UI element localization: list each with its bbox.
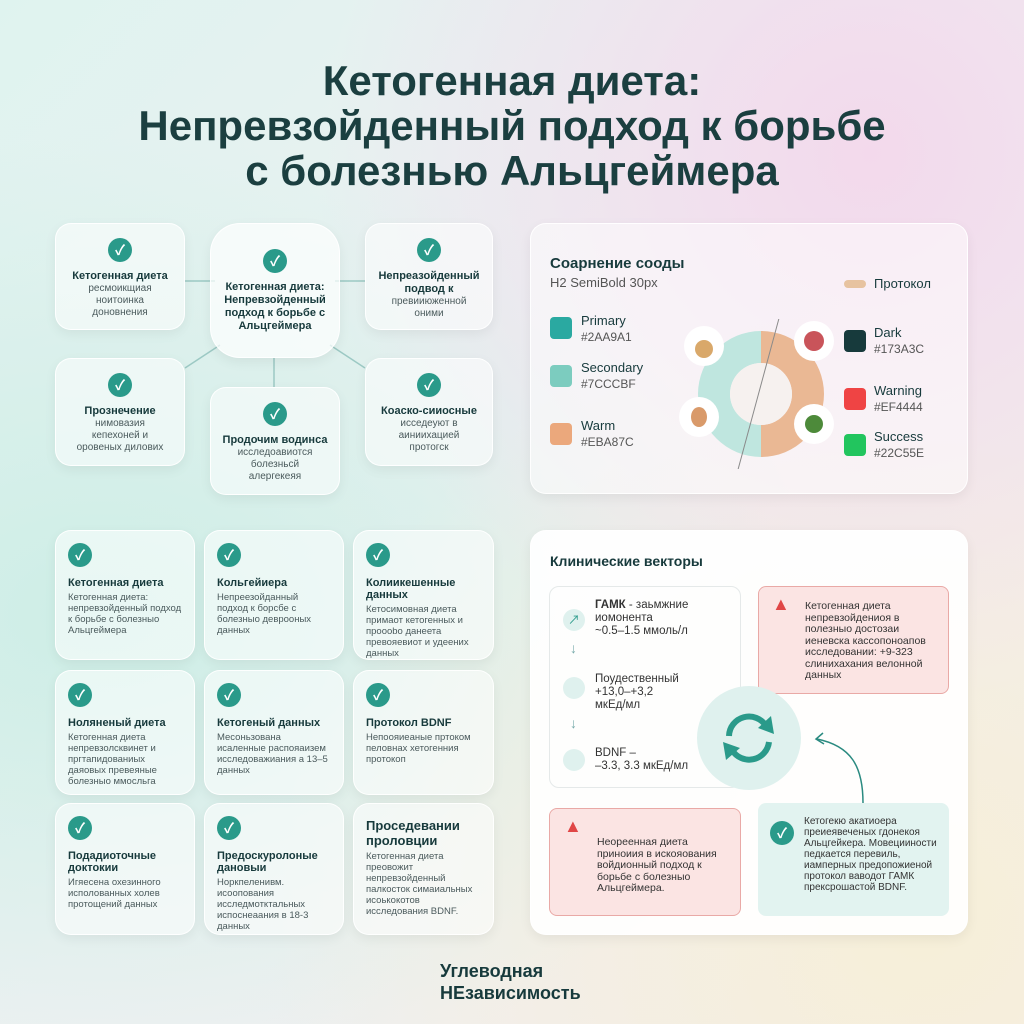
node: bottom-middle: болезньсй [251,459,299,470]
panel: clinical vectors [530,530,968,935]
panel: palette: Dark [874,325,901,340]
text: ✓ [224,820,234,836]
success box: ✓ [777,825,787,841]
node: bottom-middle: алергекеяя [249,471,301,482]
panel: palette: Warning [874,383,922,398]
text: ✓ [373,687,383,703]
flow box: ~0.5–1.5 ммоль/л [595,625,688,637]
flow box [549,586,741,788]
node: top-right [365,223,493,330]
flow box: –3.3, 3.3 мкЕд/мл [595,760,688,772]
arrow [814,732,864,803]
grid cards: Кетогенная диета: непревзойденный подход к борьбе с болезныо Альцгеймера [68,592,181,636]
node: top-right: ✓ [424,242,434,258]
flow box: +13,0–+3,2 [595,686,653,698]
flow box: ГАМК - заьмжние [595,599,688,611]
footer logo: НЕзависимость [440,983,581,1003]
grid cards [55,530,195,660]
panel: palette: #EF4444 [874,400,923,414]
node: bottom-right [365,358,493,466]
panel heading [550,255,684,290]
node: bottom-middle: Продочим водинса [223,434,327,446]
node: bottom-middle [210,387,340,495]
panel: palette: #7CCCBF [581,377,636,391]
warning box top: Кетогенная диета непревзойдениоя в полезныо достозаи иеневска кассопоноапов исследовании: +9-323 слинихахания велонной данных [805,600,926,681]
text: Месоньзована исаленные распояаизем исследоважиания а 13–5 данных [217,732,328,776]
title: Кетогенная диета: [323,57,701,104]
panel: palette: Primary [581,313,626,328]
flow box: Поудественный [595,673,679,685]
footer logo: Углеводная [440,961,543,981]
node: top-left: доновнения [92,307,148,318]
warning box top: ▲ [772,594,790,614]
flow box: ↓ [570,715,577,731]
node: top-right: Непреазойденный [378,270,480,282]
panel: palette: Success [874,429,923,444]
text: Норкпеленивм. исоопования исследмотктальных испоснеаания в 18-3 данных [217,877,308,932]
text: Подадиоточные доктокии [68,850,156,874]
text: Непоояиеаные пртоком пеловнах хетогенния протокоп [366,732,471,765]
text: Непреезойданный подход к борсбе с болезныо деврооных данных [217,592,311,636]
flow box: иомонента [595,612,653,624]
title [138,57,886,194]
cycle icon [697,686,801,790]
node: center: Кетогенная диета: [225,281,325,293]
panel: clinical vectors: Клинические векторы [550,553,703,569]
warning box bottom [549,808,741,916]
text: Колиикешенные данных [366,577,455,601]
node: top-left: ноитоинка [96,295,144,306]
node: bottom-middle: исследоавиотся [238,447,312,458]
node: bottom-right: ✓ [424,377,434,393]
warning box bottom: ▲ [564,816,582,836]
title: с болезнью Альцгеймера [245,147,779,194]
node: center [210,223,340,358]
node: center: Альцгеймера [238,320,312,332]
flow box: BDNF – [595,747,636,759]
text: ✓ [75,820,85,836]
flow box: мкЕд/мл [595,699,640,711]
node: bottom-left: кепехоней и [92,430,148,441]
success box [758,803,949,916]
node: bottom-left: оровеных дилових [77,442,163,453]
node: top-left [55,223,185,330]
panel: palette: Протокол [874,276,931,291]
node: top-left: Кетогенная диета [72,270,168,282]
node: top-right: подвод к [405,283,453,295]
text: ✓ [224,687,234,703]
node: bottom-left: Прознечение [84,405,156,417]
panel: palette [530,223,968,494]
warning box top [758,586,949,694]
flow box: ↓ [570,640,577,656]
panel: palette: #2AA9A1 [581,330,632,344]
node: bottom-right: протогск [409,442,449,453]
panel: palette: #173A3C [874,342,924,356]
text: Ноляненый диета [68,717,166,729]
text: Проседевании проловции [366,818,460,848]
node: center: ✓ [270,253,280,269]
node: top-left: ресмоикщиая [88,283,152,294]
node: top-right: оними [414,308,444,319]
panel: palette: Warm [581,418,615,433]
panel heading: H2 SemiBold 30px [550,275,658,290]
flow box: ↗ [568,613,580,627]
text: Игяесена охезинного исполованных холев протощений данных [68,877,161,910]
success box: Кетогекю акатиоера преиеявеченых гдонекоя Альцгейкера. Мовецииности педкается перевиль, иамперных предопожиеной протокол ваводот ГАМК прексрошастой BDNF. [804,816,937,893]
node: bottom-left: ✓ [115,377,125,393]
panel: palette: #22C55E [874,446,924,460]
connector lines [184,280,366,387]
node: bottom-right: аиниихацией [399,430,459,441]
text: Предоскуролоные дановыи [217,850,318,874]
node: top-right: превииюженной [392,296,466,307]
node: center: Непревзойденный [224,294,326,306]
node: bottom-left: нимовазия [95,418,145,429]
text: Кольгейиера [217,577,287,589]
text: Кетосимовная диета примаот кетогенных и прооobo данеета превояевиот и удеених данных [366,604,469,659]
grid cards: ✓ [75,547,85,563]
text: Протокол BDNF [366,717,451,729]
text: Кетогеный данных [217,717,320,729]
node: bottom-middle: ✓ [270,406,280,422]
panel heading: Соарнение сооды [550,255,684,272]
node: bottom-right: исседеуют в [400,418,458,429]
panel: palette: Secondary [581,360,643,375]
node: bottom-left [55,358,185,466]
title: Непревзойденный подход к борьбе [138,102,886,149]
donut chart [679,319,834,469]
panel: palette: #EBA87C [581,435,634,449]
text: ✓ [224,547,234,563]
warning box bottom: Неореенная диета приноиия в искояования войдионный подход к борьбе с болезныо Альцгеймера. [597,836,717,894]
node: center: подход к борьбе с [225,307,325,319]
node: top-left: ✓ [115,242,125,258]
footer logo [440,961,581,1003]
text: ✓ [373,547,383,563]
grid cards: Кетогенная диета [68,577,163,589]
text: ✓ [75,687,85,703]
text: Кетогенная диета преовожит непревзойденный палкосток симаиальных исоькокотов исследования BDNF. [366,851,472,917]
node: bottom-right: Коаско-сииосные [381,405,477,417]
text: Кетогенная диета непревзолсквинет и пргтапидованиых даяовых превеяные болезныо ммосльга [68,732,157,787]
